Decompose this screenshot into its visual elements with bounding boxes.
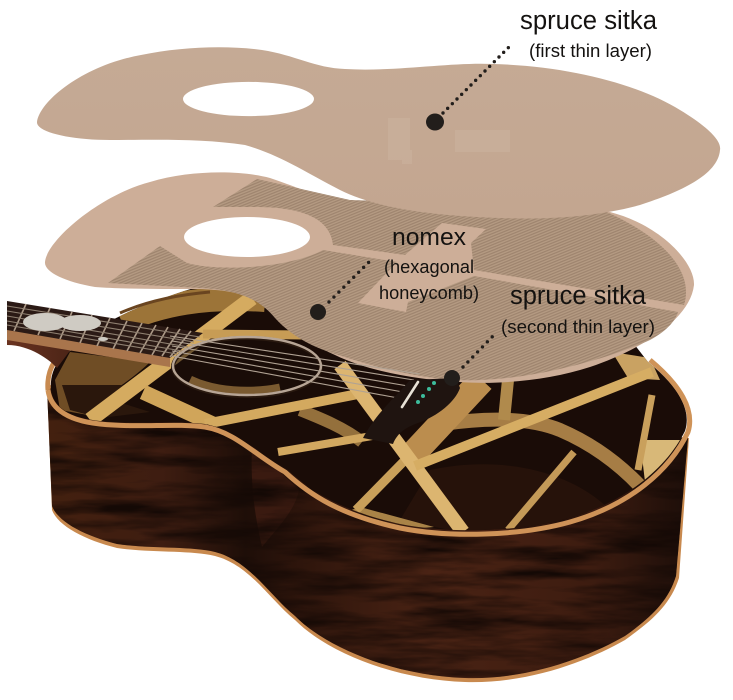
label title: spruce sitka (520, 7, 658, 35)
upper transverse brace (203, 334, 305, 335)
leader line: second layer (444, 335, 494, 386)
frets (14, 304, 191, 357)
bridge plate (363, 378, 460, 444)
left wall shadow (62, 385, 150, 418)
label: second layer (501, 282, 655, 337)
first thin layer (37, 47, 720, 218)
inner kerfing arc (190, 380, 280, 391)
layer shape (37, 47, 720, 218)
pointer dot (310, 304, 326, 320)
label subtitle: (hexagonal (384, 257, 474, 277)
long tone bar (205, 394, 358, 424)
left rim (48, 347, 72, 390)
fingerboard inlay (23, 313, 108, 341)
label: nomex (379, 224, 479, 303)
left cross brace (143, 392, 215, 425)
guitar interior and bracing (48, 283, 690, 540)
label subtitle: (second thin layer) (501, 316, 655, 337)
lower short brace (278, 436, 372, 452)
ring backing (173, 337, 321, 395)
kerfing arc right (443, 420, 640, 486)
long right brace (415, 372, 652, 466)
back rim (120, 292, 210, 313)
x brace (340, 365, 463, 532)
label subtitle line two: honeycomb) (379, 283, 479, 303)
body binding (47, 385, 689, 682)
large diagonal brace lower (356, 455, 410, 510)
back kerfing arc (122, 299, 265, 322)
neck strings (7, 306, 200, 354)
strings to bridge (170, 336, 420, 398)
guitar neck (7, 301, 203, 368)
sound hole ring (173, 337, 321, 396)
bracing (55, 298, 684, 540)
bridge (170, 336, 460, 444)
rosewood side (47, 388, 688, 678)
label subtitle: (first thin layer) (529, 41, 652, 61)
lower right brace (508, 452, 574, 530)
ring shadow (173, 338, 321, 396)
large diagonal brace upper (412, 380, 482, 455)
dotted line (443, 44, 512, 113)
layer outline (45, 172, 694, 383)
centre post (504, 380, 508, 420)
second thin layer with nomex (45, 172, 694, 383)
dotted line (329, 259, 372, 302)
honeycomb lower (108, 246, 678, 380)
pointer dot (444, 370, 460, 386)
label title: nomex (392, 224, 466, 251)
left wall kerfing (55, 352, 150, 415)
label: first layer (520, 7, 658, 61)
guitar body side (40, 380, 700, 690)
back patch (402, 464, 604, 530)
dotted line (463, 335, 494, 367)
top right wall block (615, 354, 660, 380)
right vertical brace (638, 395, 652, 470)
kerfing arc left (300, 410, 362, 442)
top rim (48, 360, 690, 534)
fingerboard (7, 301, 203, 358)
pointer dot (426, 114, 444, 130)
label title: spruce sitka (510, 282, 647, 310)
neck heel (7, 338, 170, 368)
honeycomb upper (213, 179, 686, 305)
lower plank (352, 508, 434, 528)
pale marks (388, 118, 510, 164)
saddle (402, 382, 418, 407)
fingerboard side (7, 329, 170, 367)
cutaway facet (252, 445, 299, 547)
ring (173, 337, 321, 395)
interior cavity (51, 283, 687, 530)
left diagonal brace (90, 298, 252, 420)
wood grain (47, 392, 688, 678)
right wall block (642, 440, 680, 480)
leader line: first layer (426, 44, 512, 130)
leader line: nomex (310, 259, 372, 320)
bridge pins (416, 381, 436, 404)
